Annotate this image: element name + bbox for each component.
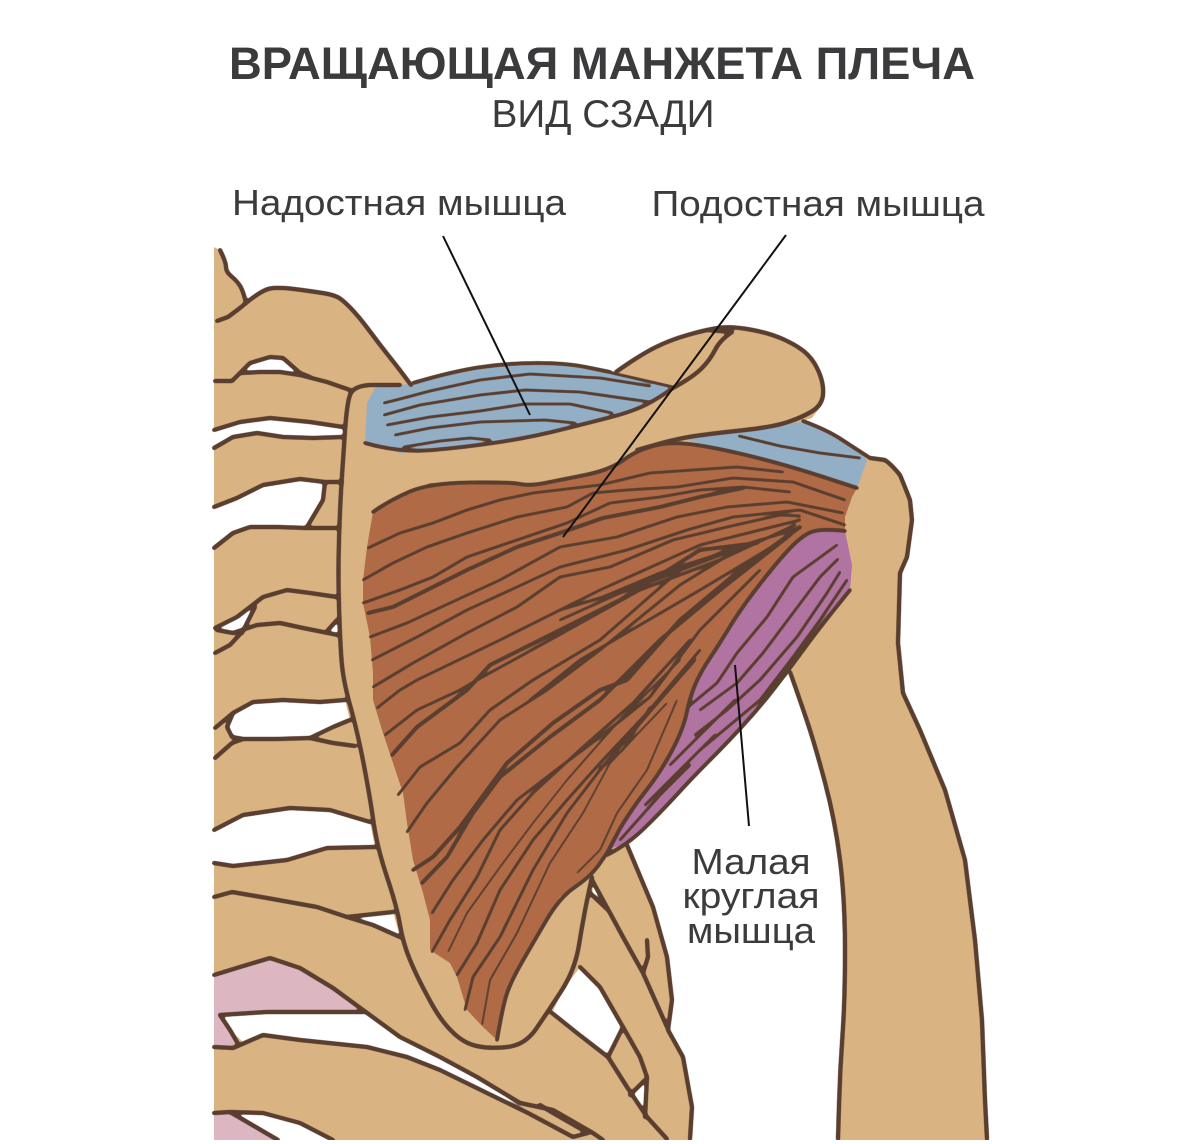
subtitle: ВИД СЗАДИ — [492, 93, 714, 136]
label: infraspinatus: Подостная мышца — [652, 183, 986, 224]
label: teres minor: Малая — [692, 841, 810, 882]
title: ВРАЩАЮЩАЯ МАНЖЕТА ПЛЕЧА — [229, 38, 975, 89]
muscle: teres minor — [607, 528, 852, 855]
muscle: supraspinatus — [365, 363, 870, 488]
scapula outline — [338, 385, 592, 1048]
acromion outline — [616, 327, 823, 450]
label: teres minor: мышца — [687, 910, 816, 951]
muscle fibres — [363, 467, 845, 1025]
anatomy illustration — [214, 247, 987, 1140]
label: infraspinatus — [563, 183, 986, 537]
pink tissue between ribs — [214, 958, 363, 1140]
gaps between ribs — [214, 357, 645, 1140]
white strip below illustration — [200, 1140, 1000, 1144]
teres fibres — [620, 545, 847, 840]
muscle: infraspinatus — [363, 441, 857, 1040]
label: supraspinatus — [232, 182, 567, 415]
bone and rib outlines — [214, 250, 987, 1140]
label: supraspinatus: Надостная мышца — [232, 182, 567, 223]
label: teres minor: круглая — [682, 875, 820, 916]
label: teres minor — [682, 665, 820, 951]
skeleton silhouette: ribs, scapula and arm — [214, 247, 987, 1140]
